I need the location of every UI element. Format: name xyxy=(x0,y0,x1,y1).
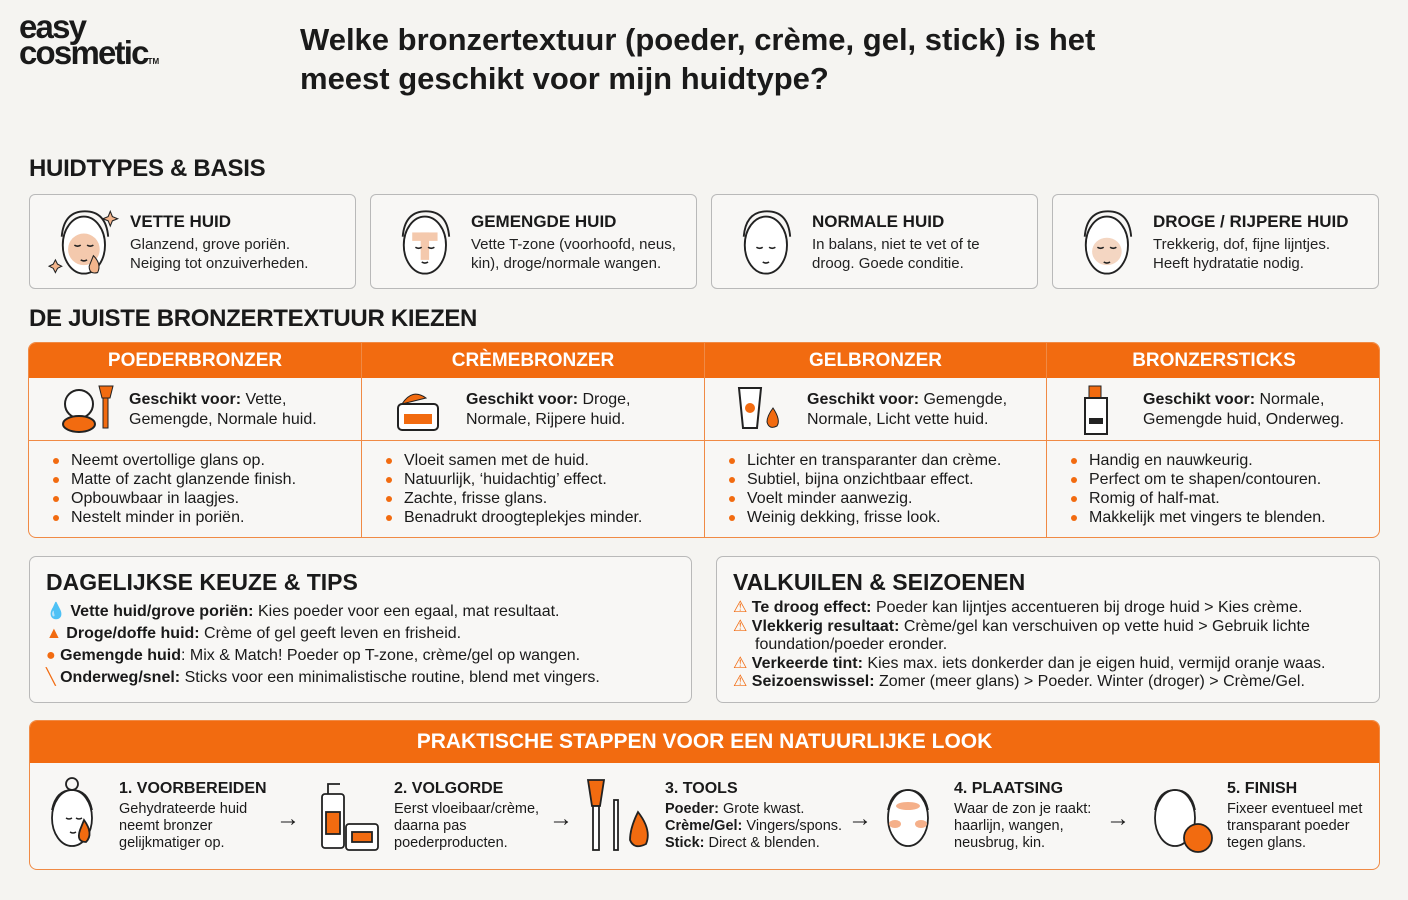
card: droge huid: Trekkerig, dof, fijne lijntjes. xyxy=(1153,236,1330,253)
icon: stick xyxy=(1084,386,1108,435)
column: gelbronzer: Normale, Licht vette huid. xyxy=(807,411,988,428)
table frame xyxy=(28,342,1380,538)
card: droge huid xyxy=(1052,194,1379,289)
arrow: → xyxy=(276,805,300,832)
column: poederbronzer xyxy=(29,343,362,539)
step 2: Eerst vloeibaar/crème, xyxy=(394,801,539,817)
step 5 xyxy=(1227,780,1362,851)
step 2: daarna pas xyxy=(394,818,467,834)
logo xyxy=(19,8,159,71)
panel: dagelijkse keuze xyxy=(29,556,692,703)
panel: praktische stappen xyxy=(29,720,1380,870)
column: poederbronzer: Neemt overtollige glans op. xyxy=(71,452,265,469)
icon: face xyxy=(742,210,792,274)
column: bronzersticks: Geschikt voor: Normale, xyxy=(1143,391,1324,408)
panel: valkuilen: ⚠ Te droog effect: Poeder kan lijntjes accentueren bij droge huid > Kies crème. xyxy=(733,599,1302,616)
panel: dagelijkse keuze: ▲ Droge/doffe huid: Crème of gel geeft leven en frisheid. xyxy=(46,625,461,642)
step 1: neemt bronzer xyxy=(119,818,212,834)
column: bronzersticks: Gemengde huid, Onderweg. xyxy=(1143,411,1344,428)
panel: valkuilen: ⚠ Seizoenswissel: Zomer (meer glans) > Poeder. Winter (droger) > Crème/Gel. xyxy=(733,673,1305,690)
column: bronzersticks: BRONZERSTICKS xyxy=(1132,350,1296,371)
logo: easy xyxy=(19,8,85,45)
step 5: Fixeer eventueel met xyxy=(1227,801,1362,817)
card: vette huid: Glanzend, grove poriën. xyxy=(130,236,290,253)
steps header: PRAKTISCHE STAPPEN VOOR EEN NATUURLIJKE LOOK xyxy=(417,730,992,753)
column: cremebronzer xyxy=(362,343,705,539)
step 3: Stick: Direct & blenden. xyxy=(665,835,820,851)
step 4: 4. PLAATSING xyxy=(954,780,1063,797)
step 4: neusbrug, kin. xyxy=(954,835,1045,851)
column: cremebronzer: Normale, Rijpere huid. xyxy=(466,411,625,428)
column: gelbronzer xyxy=(705,343,1047,539)
step 1: gelijkmatiger op. xyxy=(119,835,225,851)
card: vette huid: VETTE HUID xyxy=(130,212,231,231)
icon: jar xyxy=(397,394,439,431)
step icons xyxy=(51,777,1213,853)
steps header xyxy=(30,721,1379,763)
icon: compact xyxy=(62,386,114,433)
step 2: poederproducten. xyxy=(394,835,508,851)
column: bronzersticks xyxy=(1047,343,1379,526)
icon: face xyxy=(402,210,450,274)
title: Welke bronzertextuur (poeder, crème, gel, stick) is het xyxy=(300,22,1095,57)
icon: face xyxy=(48,210,119,274)
step 4: haarlijn, wangen, xyxy=(954,818,1064,834)
step 5: 5. FINISH xyxy=(1227,780,1297,797)
card: normale huid xyxy=(711,194,1038,289)
column: gelbronzer: Voelt minder aanwezig. xyxy=(747,490,912,507)
column: poederbronzer: Gemengde, Normale huid. xyxy=(129,411,317,428)
column: poederbronzer: POEDERBRONZER xyxy=(108,350,282,371)
column: bronzersticks: Romig of half-mat. xyxy=(1089,490,1220,507)
column: cremebronzer: CRÈMEBRONZER xyxy=(452,350,614,371)
column: poederbronzer: Matte of zacht glanzende finish. xyxy=(71,471,296,488)
column: gelbronzer: Lichter en transparanter dan crème. xyxy=(747,452,1001,469)
column: bronzersticks: Handig en nauwkeurig. xyxy=(1089,452,1253,469)
column: cremebronzer: Zachte, frisse glans. xyxy=(404,490,547,507)
card: droge huid: Heeft hydratatie nodig. xyxy=(1153,255,1304,272)
panel: dagelijkse keuze: ● Gemengde huid: Mix & Match! Poeder op T-zone, crème/gel op wangen. xyxy=(46,647,580,664)
arrow: → xyxy=(549,805,573,832)
column: gelbronzer: Geschikt voor: Gemengde, xyxy=(807,391,1007,408)
column: poederbronzer: Geschikt voor: Vette, xyxy=(129,391,286,408)
step 3: 3. TOOLS xyxy=(665,780,738,797)
column: bronzersticks: Perfect om te shapen/contouren. xyxy=(1089,471,1321,488)
step 4 xyxy=(954,780,1091,851)
step 2 xyxy=(394,780,539,851)
column: gelbronzer: GELBRONZER xyxy=(809,350,942,371)
heading: huidtypes: HUIDTYPES & BASIS xyxy=(29,155,265,182)
card: gemengde huid: kin), droge/normale wangen. xyxy=(471,255,661,272)
step 5: tegen glans. xyxy=(1227,835,1306,851)
title xyxy=(300,22,1095,96)
panel: dagelijkse keuze: 💧 Vette huid/grove poriën: Kies poeder voor een egaal, mat resultaat. xyxy=(46,603,559,620)
card: normale huid: droog. Goede conditie. xyxy=(812,255,964,272)
card: gemengde huid xyxy=(370,194,697,289)
column: cremebronzer: Benadrukt droogteplekjes minder. xyxy=(404,509,642,526)
card: normale huid: NORMALE HUID xyxy=(812,212,944,231)
card: gemengde huid: Vette T-zone (voorhoofd, neus, xyxy=(471,236,676,253)
panel: valkuilen: ⚠ Vlekkerig resultaat: Crème/gel kan verschuiven op vette huid > Gebruik lichte foundation/poeder eronder. xyxy=(733,618,1310,653)
card: vette huid xyxy=(29,194,356,289)
column: gelbronzer: Subtiel, bijna onzichtbaar effect. xyxy=(747,471,974,488)
panel: dagelijkse keuze: DAGELIJKSE KEUZE & TIPS xyxy=(46,569,358,595)
step 1 xyxy=(119,780,267,851)
icon: tube xyxy=(738,387,779,429)
panel: valkuilen: ⚠ Verkeerde tint: Kies max. iets donkerder dan je eigen huid, vermijd oranje waas. xyxy=(733,654,1325,672)
panel: dagelijkse keuze: ╲ Onderweg/snel: Sticks voor een minimalistische routine, blend met vingers. xyxy=(46,669,600,686)
icon: face xyxy=(1084,210,1132,274)
card: droge huid: DROGE / RIJPERE HUID xyxy=(1153,212,1349,231)
arrow: → xyxy=(848,805,872,832)
panel: valkuilen xyxy=(716,556,1380,703)
step 2: 2. VOLGORDE xyxy=(394,780,503,797)
arrow: → xyxy=(1106,805,1130,832)
step 1: 1. VOORBEREIDEN xyxy=(119,780,267,797)
step 4: Waar de zon je raakt: xyxy=(954,801,1091,817)
column: gelbronzer: Weinig dekking, frisse look. xyxy=(747,509,941,526)
card: vette huid: Neiging tot onzuiverheden. xyxy=(130,255,308,272)
column: cremebronzer: Vloeit samen met de huid. xyxy=(404,452,589,469)
logo: cosmeticTM xyxy=(19,34,159,71)
title: meest geschikt voor mijn huidtype? xyxy=(300,61,829,96)
panel: valkuilen: VALKUILEN & SEIZOENEN xyxy=(733,569,1025,595)
heading: textuur kiezen: DE JUISTE BRONZERTEXTUUR KIEZEN xyxy=(29,305,477,332)
card: gemengde huid: GEMENGDE HUID xyxy=(471,212,616,231)
step 3: Poeder: Grote kwast. xyxy=(665,801,804,817)
column: cremebronzer: Geschikt voor: Droge, xyxy=(466,391,630,408)
column: poederbronzer: Opbouwbaar in laagjes. xyxy=(71,490,239,507)
step 5: transparant poeder xyxy=(1227,818,1350,834)
column: poederbronzer: Nestelt minder in poriën. xyxy=(71,509,244,526)
step 1: Gehydrateerde huid xyxy=(119,801,247,817)
step 3: Crème/Gel: Vingers/spons. xyxy=(665,818,842,834)
column: bronzersticks: Makkelijk met vingers te blenden. xyxy=(1089,509,1326,526)
card: normale huid: In balans, niet te vet of te xyxy=(812,236,980,253)
step 3 xyxy=(665,780,842,851)
column: cremebronzer: Natuurlijk, ‘huidachtig’ effect. xyxy=(404,471,607,488)
